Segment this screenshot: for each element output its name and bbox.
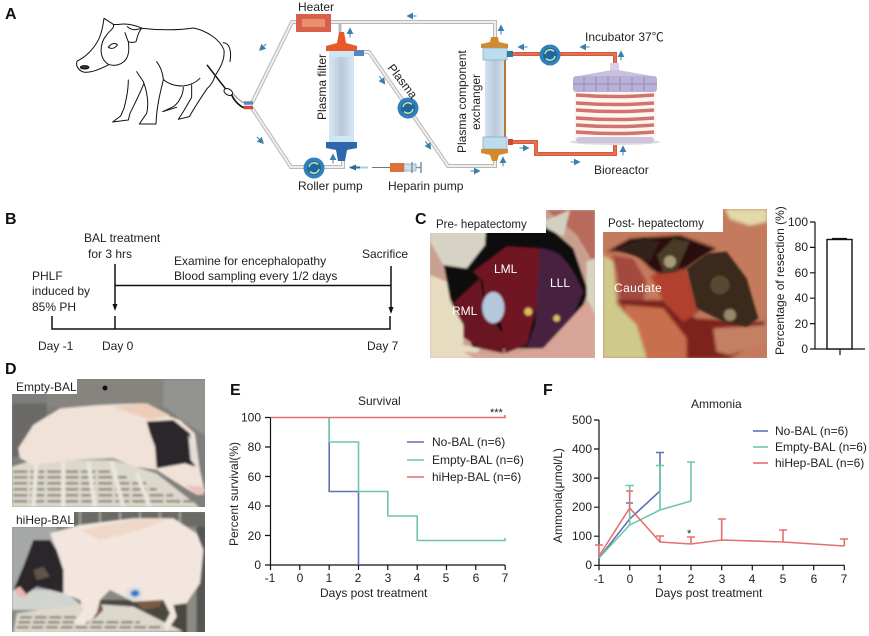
legend: hiHep-BAL (n=6)	[432, 470, 521, 484]
label box: post-hepatectomy: Post- hepatectomy	[608, 218, 704, 230]
series: Empty-BAL	[599, 462, 695, 558]
icon: pig line drawing	[77, 18, 246, 124]
series: hiHep-BAL	[595, 491, 848, 556]
heparin pump syringe: Heparin pump	[388, 179, 464, 193]
bar chart: percentage of resection: 60	[795, 266, 808, 280]
timeline labels: Day -1	[38, 339, 74, 353]
axis tick labels: 0	[297, 571, 304, 585]
bar chart: percentage of resection	[773, 206, 865, 356]
axis tick labels: 2	[355, 571, 362, 585]
panel A: bioartificial liver circuit	[5, 0, 664, 193]
axis tick labels: 6	[811, 572, 818, 586]
axis tick labels: Days post treatment	[320, 586, 428, 600]
timeline axes	[52, 264, 394, 329]
timeline labels: for 3 hrs	[88, 247, 132, 261]
axis tick labels: -1	[265, 571, 276, 585]
axis tick labels: 6	[473, 571, 480, 585]
timeline labels: 85% PH	[32, 300, 76, 314]
axis tick labels: 7	[841, 572, 848, 586]
axis tick labels: 2	[688, 572, 695, 586]
panel letter C: C	[415, 211, 427, 228]
timeline labels: PHLF	[32, 269, 63, 283]
timeline labels: BAL treatment	[84, 231, 161, 245]
label box: post-hepatectomy	[603, 209, 723, 232]
axis tick labels: 100	[572, 529, 592, 543]
axis tick labels: 500	[572, 413, 592, 427]
timeline labels: Day 0	[102, 339, 134, 353]
axis tick labels: 1	[326, 571, 333, 585]
label box: hiHep-BAL: hiHep-BAL	[16, 513, 74, 527]
legend	[407, 435, 524, 484]
axis tick labels: 300	[572, 471, 592, 485]
legend: Empty-BAL (n=6)	[775, 440, 867, 454]
heater: Heater	[298, 0, 334, 14]
tubing: gray circuit	[244, 22, 495, 167]
panel letter F: F	[543, 382, 553, 399]
series: No-BAL	[599, 452, 664, 558]
photo: pre-hepatectomy liver	[430, 210, 595, 358]
chart title: Survival	[358, 394, 401, 408]
panel F: ammonia chart	[543, 382, 867, 600]
timeline labels: Blood sampling every 1/2 days	[174, 269, 337, 283]
panel C: hepatectomy photos and resection chart	[415, 206, 865, 358]
axis tick labels: Percent survival(%)	[227, 442, 241, 546]
photo: pre-hepatectomy liver: LLL	[550, 276, 570, 290]
plasma filter: Plasma filter	[315, 54, 329, 120]
photo: pre-hepatectomy liver: RML	[452, 304, 478, 318]
chart title: Ammonia	[691, 397, 742, 411]
axis tick labels: 400	[572, 442, 592, 456]
photo: pre-hepatectomy liver: LML	[494, 262, 518, 276]
photo: hiHep-BAL pig standing	[12, 512, 207, 633]
axis tick labels	[551, 413, 848, 600]
axes	[265, 418, 505, 570]
plasma component exchanger: Plasma component	[455, 50, 469, 153]
roller pump: Roller pump	[298, 179, 363, 193]
axis tick labels: 0	[627, 572, 634, 586]
plasma pump: Plasma	[385, 61, 421, 102]
heparin pump syringe	[349, 162, 464, 193]
panel letter E: E	[230, 382, 241, 399]
panel E: survival chart	[227, 382, 524, 600]
timeline labels: Sacrifice	[362, 247, 408, 261]
bar chart: percentage of resection: 80	[795, 240, 808, 254]
bar chart: percentage of resection: 0	[801, 342, 808, 356]
photo: post-hepatectomy liver: Caudate	[614, 281, 662, 295]
axes	[594, 420, 844, 570]
axis tick labels: 0	[585, 558, 592, 572]
bioreactor: Bioreactor	[594, 163, 649, 177]
significance star: *	[687, 528, 692, 540]
incubator label: Incubator 37℃	[585, 30, 664, 44]
axis tick labels: Ammonia(μmol/L)	[551, 448, 565, 543]
survival curves	[270, 415, 505, 565]
legend: No-BAL (n=6)	[432, 435, 505, 449]
bar chart: percentage of resection: 20	[795, 317, 808, 331]
axis tick labels: -1	[594, 572, 605, 586]
label box: Empty-BAL: Empty-BAL	[16, 380, 77, 394]
photo: Empty-BAL pig lying	[12, 379, 207, 507]
timeline labels: induced by	[32, 284, 90, 298]
exchanger pump	[540, 44, 560, 66]
axis tick labels: 80	[248, 440, 261, 454]
axis tick labels: 3	[719, 572, 726, 586]
axis tick labels: 5	[780, 572, 787, 586]
axis tick labels: 1	[657, 572, 664, 586]
legend: Empty-BAL (n=6)	[432, 453, 524, 467]
photo: post-hepatectomy liver	[603, 209, 767, 358]
plasma component exchanger	[455, 37, 508, 161]
axis tick labels: 20	[248, 529, 261, 543]
axis tick labels: Days post treatment	[655, 586, 763, 600]
panel B: timeline	[5, 211, 408, 353]
label box: pre-hepatectomy	[430, 210, 546, 233]
axis tick labels: 0	[254, 558, 261, 572]
heater	[296, 0, 334, 32]
axis tick labels: 3	[385, 571, 392, 585]
flow arrows	[255, 13, 626, 174]
bioreactor	[570, 63, 660, 177]
panel letter D: D	[5, 361, 17, 378]
bar chart: percentage of resection: 100	[788, 215, 808, 229]
timeline labels	[32, 231, 408, 353]
legend	[753, 424, 867, 470]
axis tick labels: 4	[414, 571, 421, 585]
label box: pre-hepatectomy: Pre- hepatectomy	[436, 219, 527, 231]
panel letter B: B	[5, 211, 17, 228]
bar chart: percentage of resection: Percentage of resection (%)	[773, 206, 787, 355]
roller pump	[298, 158, 363, 193]
axis tick labels: 40	[248, 499, 261, 513]
axis tick labels: 5	[443, 571, 450, 585]
plasma filter	[315, 32, 364, 161]
timeline labels: Examine for encephalopathy	[174, 254, 326, 268]
bar chart: percentage of resection: 40	[795, 291, 808, 305]
timeline labels: Day 7	[367, 339, 399, 353]
axis tick labels: 7	[502, 571, 509, 585]
axis tick labels: 200	[572, 500, 592, 514]
axis tick labels: 4	[749, 572, 756, 586]
significance stars: ***	[490, 407, 504, 419]
legend: No-BAL (n=6)	[775, 424, 848, 438]
axis tick labels: 60	[248, 470, 261, 484]
red tubing	[507, 51, 615, 154]
plasma pump	[385, 61, 421, 118]
axis tick labels: 100	[241, 410, 261, 424]
plasma component exchanger: exchanger	[469, 74, 483, 130]
panel letter A: A	[5, 6, 17, 23]
legend: hiHep-BAL (n=6)	[775, 456, 864, 470]
axis tick labels	[227, 410, 509, 600]
panel D: pig photos	[5, 361, 207, 633]
